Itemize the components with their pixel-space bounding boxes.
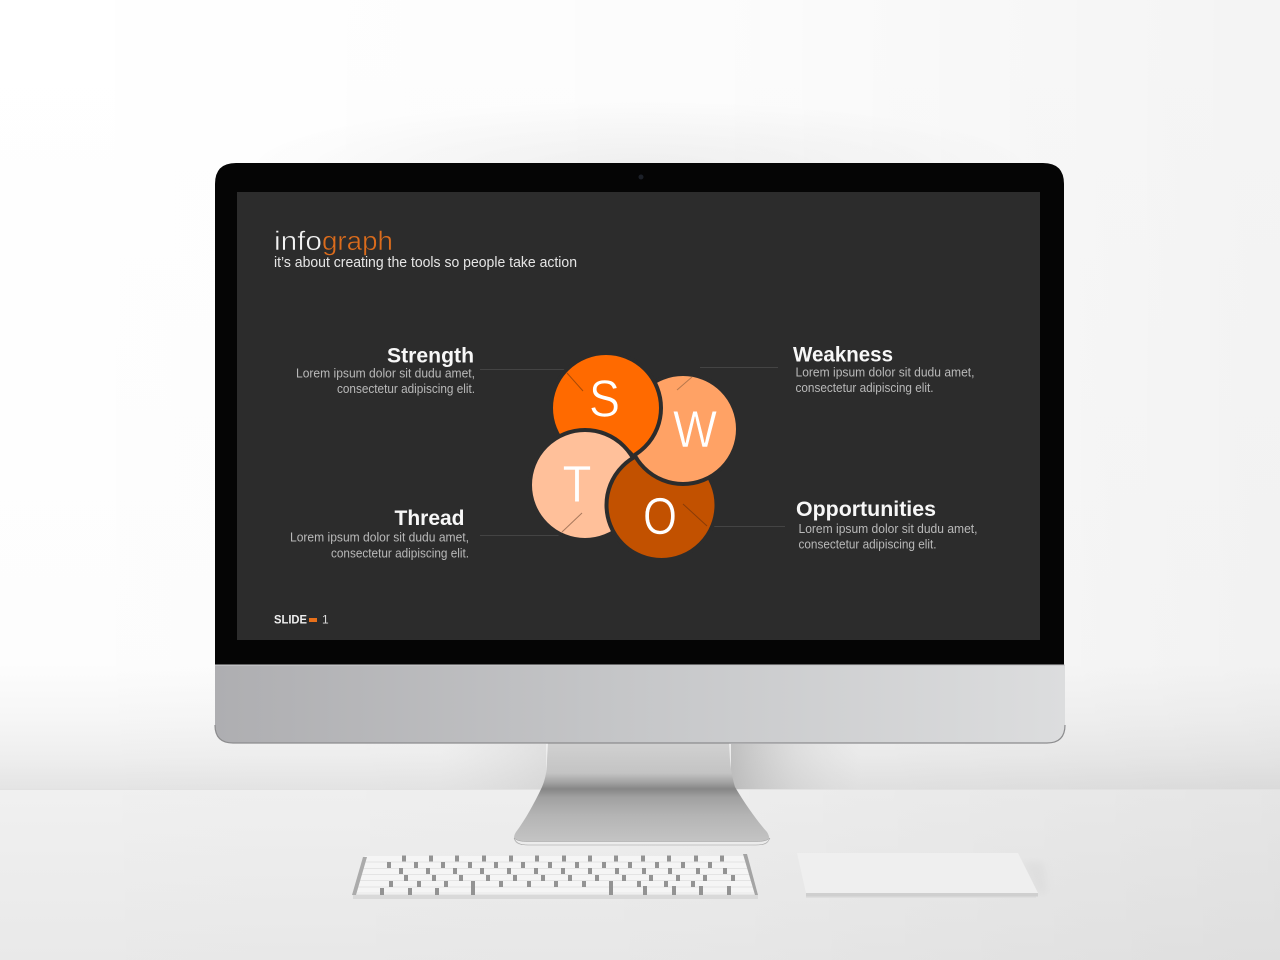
camera	[638, 174, 644, 180]
label: Opportunities	[796, 498, 978, 552]
slide screen	[237, 192, 1040, 640]
petal: T	[530, 430, 640, 540]
trackpad	[797, 853, 1048, 898]
label: Strength: Strength	[387, 344, 474, 368]
petal letters: T	[562, 456, 592, 514]
label: Thread	[290, 507, 469, 560]
petal: O	[606, 450, 716, 560]
label: Opportunities: Lorem ipsum dolor sit dudu amet,	[798, 522, 978, 536]
label: Thread: Thread	[394, 507, 464, 530]
label: Strength	[296, 344, 475, 396]
label: Weakness	[793, 344, 974, 395]
keyboard	[352, 854, 758, 899]
title	[274, 226, 393, 256]
slide number	[274, 612, 329, 626]
label: Weakness: Lorem ipsum dolor sit dudu amet,	[796, 366, 974, 380]
SWOT petal diagram	[530, 353, 738, 560]
label: Thread: Lorem ipsum dolor sit dudu amet,	[290, 530, 469, 544]
petal: S base	[551, 353, 661, 463]
monitor body	[215, 163, 1065, 743]
label: Thread: consectetur adipiscing elit.	[331, 546, 469, 560]
petal letters: S	[589, 370, 620, 428]
petal letters: O	[643, 488, 677, 546]
label: Opportunities: Opportunities	[796, 498, 936, 521]
petal leader ticks	[562, 373, 707, 532]
petal letters	[562, 370, 717, 546]
label: Weakness: Weakness	[793, 344, 893, 366]
petal letters: W	[673, 401, 717, 459]
label: Weakness: consectetur adipiscing elit.	[796, 381, 934, 395]
connector lines	[480, 368, 785, 536]
title: info	[274, 226, 322, 256]
petal: S overlap on W	[622, 358, 663, 456]
slide number: 1	[322, 612, 329, 626]
monitor stand	[514, 743, 770, 845]
title: graph	[322, 226, 393, 256]
label: Opportunities: consectetur adipiscing elit.	[798, 538, 936, 552]
slide number: SLIDE	[274, 612, 307, 626]
label: Strength: Lorem ipsum dolor sit dudu amet,	[296, 366, 475, 380]
petal: W	[628, 374, 738, 484]
label: Strength: consectetur adipiscing elit.	[337, 382, 475, 396]
subtitle: it’s about creating the tools so people take action	[274, 255, 577, 271]
